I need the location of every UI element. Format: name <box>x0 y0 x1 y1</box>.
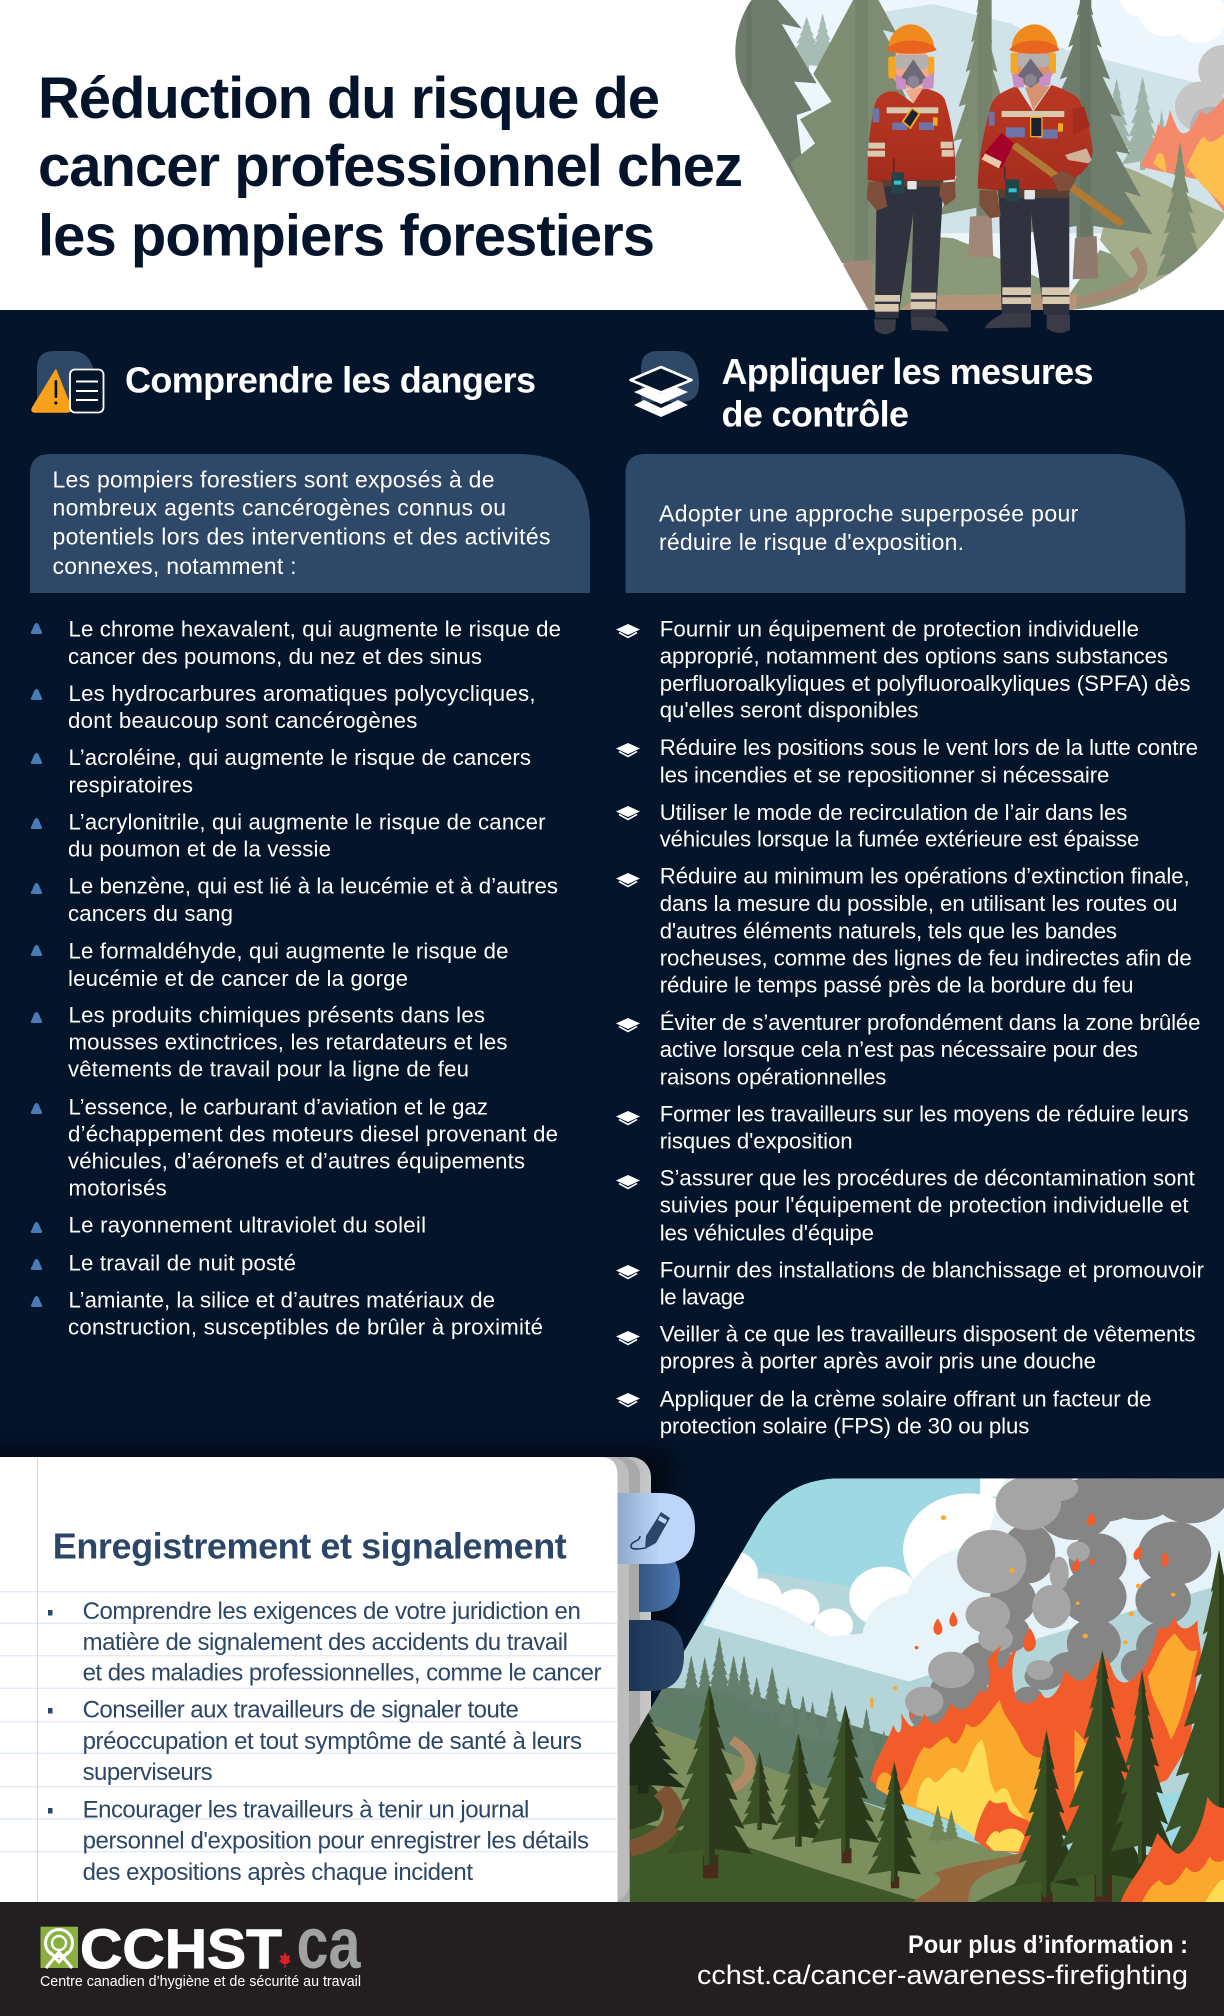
intro box: Les pompiers forestiers sont exposés à de <box>52 466 494 492</box>
logo: CCHST: ca <box>296 1904 361 1984</box>
heading <box>722 351 1094 435</box>
item: benzene: cancers du sang <box>68 901 233 926</box>
item: extinction finale: rocheuses, comme des lignes de feu indirectes afin de <box>660 946 1192 971</box>
background forest <box>630 1687 890 1810</box>
item: decontamination: S’assurer que les procédures de décontamination sont <box>660 1166 1195 1191</box>
foreground hills <box>630 1822 924 1902</box>
intro box: nombreux agents cancérogènes connus ou <box>52 495 506 521</box>
item: acrylonitrile: L’acrylonitrile, qui augmente le risque de cancer <box>68 809 546 834</box>
list: carcinogens <box>31 617 561 1340</box>
item: vetements propres: propres à porter après avoir pris une douche <box>660 1349 1096 1374</box>
item: amiante: construction, susceptibles de brûler à proximité <box>68 1315 543 1340</box>
item: recirculation: véhicules lorsque la fumée extérieure est épaisse <box>660 827 1139 852</box>
item: journal: Encourager les travailleurs à tenir un journal <box>83 1797 529 1824</box>
ground <box>840 237 1147 313</box>
item: essence: motorisés <box>68 1176 167 1201</box>
notebook page stack <box>540 1457 651 1902</box>
firefighter: right with axe <box>978 24 1125 333</box>
item: extinction finale: réduire le temps passé près de la bordure du feu <box>660 973 1134 998</box>
tree: far-left dark <box>735 0 817 193</box>
intro box: Adopter une approche superposée pour <box>659 501 1079 527</box>
icon: warning and document <box>32 351 103 412</box>
panel: enregistrement et signalement notebook <box>0 1457 618 1902</box>
tree: large left <box>791 0 914 264</box>
item: chrome: cancer des poumons, du nez et des sinus <box>68 644 482 669</box>
item: formaldehyde: Le formaldéhyde, qui augmente le risque de <box>68 939 508 964</box>
item: zone brulee: active lorsque cela n’est pas nécessaire pour des <box>660 1037 1138 1062</box>
item: exigences: Comprendre les exigences de votre juridiction en <box>83 1598 581 1625</box>
item: conseiller: préoccupation et tout symptôme de santé à leurs <box>83 1728 582 1755</box>
item: EPI: Fournir un équipement de protection individuelle <box>660 617 1139 642</box>
item: acroleine <box>31 745 531 797</box>
item: extinction finale: dans la mesure du possible, en utilisant les routes ou <box>660 891 1178 916</box>
item: decontamination: les véhicules d'équipe <box>660 1220 874 1245</box>
shadow around notebook <box>0 1450 670 1650</box>
more information <box>697 1931 1188 1990</box>
item: decontamination: suivies pour l'équipement de protection individuelle et <box>660 1193 1189 1218</box>
more information: cchst.ca/cancer-awareness-firefighting <box>697 1960 1188 1990</box>
item: creme solaire: protection solaire (FPS) de 30 ou plus <box>660 1414 1029 1439</box>
item: former: risques d'exposition <box>660 1129 853 1154</box>
item: hydrocarbures: Les hydrocarbures aromatiques polycycliques, <box>68 681 536 706</box>
item: zone brulee: Éviter de s’aventurer profondément dans la zone brûlée <box>660 1010 1200 1035</box>
item: former <box>616 1102 1189 1154</box>
smoke: dark masses <box>908 1478 1224 1728</box>
trees: mid and right <box>942 1 1000 216</box>
icon: layers <box>630 351 699 417</box>
item: mousses <box>31 1002 508 1082</box>
heading: Enregistrement et signalement <box>53 1525 567 1566</box>
item: exigences <box>48 1598 602 1687</box>
item: positions sous le vent <box>616 735 1198 787</box>
item: essence <box>31 1094 558 1201</box>
icon: logo emblem <box>40 1927 78 1968</box>
item: formaldehyde: leucémie et de cancer de la gorge <box>68 966 408 991</box>
title: Réduction du risque de <box>38 66 660 131</box>
intro box <box>30 454 590 593</box>
title <box>38 66 743 268</box>
item: chrome: Le chrome hexavalent, qui augmente le risque de <box>68 617 561 642</box>
item: essence: d’échappement des moteurs diesel provenant de <box>68 1122 558 1147</box>
list: controls <box>616 617 1205 1439</box>
item: zone brulee <box>616 1010 1200 1089</box>
item: exigences: matière de signalement des accidents du travail <box>83 1629 568 1656</box>
clouds <box>718 1478 1007 1637</box>
item: decontamination <box>616 1166 1195 1245</box>
item: EPI <box>616 617 1190 723</box>
item: acroleine: L’acroléine, qui augmente le risque de cancers <box>68 745 531 770</box>
item: amiante <box>31 1288 543 1340</box>
item: conseiller: superviseurs <box>83 1759 213 1786</box>
item: chrome <box>31 617 561 669</box>
item: recirculation <box>616 800 1139 852</box>
item: blanchissage: Fournir des installations de blanchissage et promouvoir <box>660 1258 1205 1283</box>
smoke: light masses <box>905 1475 1090 1717</box>
icon: pencil <box>631 1512 670 1549</box>
illustration: forest scene behind firefighters <box>700 0 1224 313</box>
item: vetements propres: Veiller à ce que les travailleurs disposent de vêtements <box>660 1322 1196 1347</box>
item: travail de nuit: Le travail de nuit posté <box>68 1251 296 1276</box>
item: acrylonitrile <box>31 809 546 862</box>
item: mousses: Les produits chimiques présents dans les <box>68 1002 485 1027</box>
tree stumps <box>968 215 993 258</box>
item: essence: véhicules, d’aéronefs et d’autres équipements <box>68 1149 525 1174</box>
item: zone brulee: raisons opérationnelles <box>660 1064 886 1089</box>
item: extinction finale: d'autres éléments naturels, tels que les bandes <box>660 918 1117 943</box>
heading: de contrôle <box>722 394 909 435</box>
item: acroleine: respiratoires <box>68 772 193 797</box>
flames: orange layer <box>876 1633 1198 1837</box>
item: former: Former les travailleurs sur les moyens de réduire leurs <box>660 1102 1189 1127</box>
heading: Comprendre les dangers <box>125 359 536 400</box>
smoke <box>1198 45 1224 95</box>
heading: Appliquer les mesures <box>722 351 1094 392</box>
intro box: potentiels lors des interventions et des activités <box>52 523 550 549</box>
footer <box>0 1902 1224 2016</box>
item: EPI: approprié, notamment des options sans substances <box>660 644 1168 669</box>
item: conseiller: Conseiller aux travailleurs de signaler toute <box>83 1697 519 1724</box>
item: journal: personnel d'exposition pour enregistrer les détails <box>83 1828 589 1855</box>
item: creme solaire <box>616 1387 1152 1439</box>
item: journal <box>48 1797 589 1886</box>
logo: CCHST: Centre canadien d’hygiène et de sécurité au travail <box>40 1974 361 1990</box>
item: rayonnement: Le rayonnement ultraviolet du soleil <box>68 1213 426 1238</box>
header band <box>0 0 1224 310</box>
item: recirculation: Utiliser le mode de recirculation de l’air dans les <box>660 800 1127 825</box>
item: vetements propres <box>616 1322 1196 1374</box>
notebook tabs <box>617 1493 695 1691</box>
item: acrylonitrile: du poumon et de la vessie <box>68 837 331 862</box>
item: hydrocarbures <box>31 681 536 733</box>
item: benzene <box>31 874 558 926</box>
item: extinction finale <box>616 864 1192 998</box>
item: blanchissage: le lavage <box>660 1285 745 1310</box>
item: benzene: Le benzène, qui est lié à la leucémie et à d’autres <box>68 874 558 899</box>
title: cancer professionnel chez <box>38 134 743 199</box>
title: les pompiers forestiers <box>38 204 655 268</box>
item: mousses: mousses extinctrices, les retardateurs et les <box>68 1029 508 1054</box>
item: creme solaire: Appliquer de la crème solaire offrant un facteur de <box>660 1387 1152 1412</box>
item: positions sous le vent: les incendies et se repositionner si nécessaire <box>660 762 1109 787</box>
item: EPI: qu'elles seront disponibles <box>660 698 918 723</box>
bottom-right flames <box>1121 1797 1224 1902</box>
flames <box>1140 97 1224 213</box>
intro box: connexes, notamment : <box>52 553 296 579</box>
intro box <box>626 454 1186 593</box>
item: journal: des expositions après chaque incident <box>83 1859 473 1886</box>
flames: yellow layer <box>916 1740 1026 1837</box>
panel: comprendre les dangers <box>30 351 590 1340</box>
foreground trees <box>703 1848 1112 1903</box>
embers and flying flames <box>909 1513 1169 1718</box>
item: hydrocarbures: dont beaucoup sont cancérogènes <box>68 708 417 733</box>
item: positions sous le vent: Réduire les positions sous le vent lors de la lutte contre <box>660 735 1198 760</box>
item: formaldehyde <box>31 939 509 991</box>
firefighter: left <box>867 24 956 334</box>
item: essence: L’essence, le carburant d’aviation et le gaz <box>68 1094 488 1119</box>
logo: CCHST: CCHST <box>80 1917 282 1980</box>
trail <box>1067 250 1143 302</box>
panel: appliquer les mesures de controle <box>616 351 1205 1439</box>
more information: Pour plus d’information : <box>908 1931 1188 1959</box>
item: EPI: perfluoroalkyliques et polyfluoroalkyliques (SPFA) dès <box>660 671 1190 696</box>
mountain <box>659 1583 1224 1793</box>
item: exigences: et des maladies professionnelles, comme le cancer <box>83 1660 602 1687</box>
flames: red layer <box>870 1617 1201 1853</box>
item: blanchissage <box>616 1258 1205 1310</box>
logo: CCHST <box>40 1904 361 1990</box>
item: mousses: vêtements de travail pour la ligne de feu <box>68 1057 469 1082</box>
intro box: réduire le risque d'exposition. <box>659 529 964 555</box>
hill <box>630 1717 1044 1902</box>
item: extinction finale: Réduire au minimum les opérations d’extinction finale, <box>660 864 1190 889</box>
illustration: forest fire scene <box>630 1478 1224 1902</box>
icon: maple leaf <box>279 1952 291 1968</box>
item: amiante: L’amiante, la silice et d’autres matériaux de <box>68 1288 495 1313</box>
item: conseiller <box>48 1697 582 1786</box>
sky <box>630 1478 1224 1900</box>
